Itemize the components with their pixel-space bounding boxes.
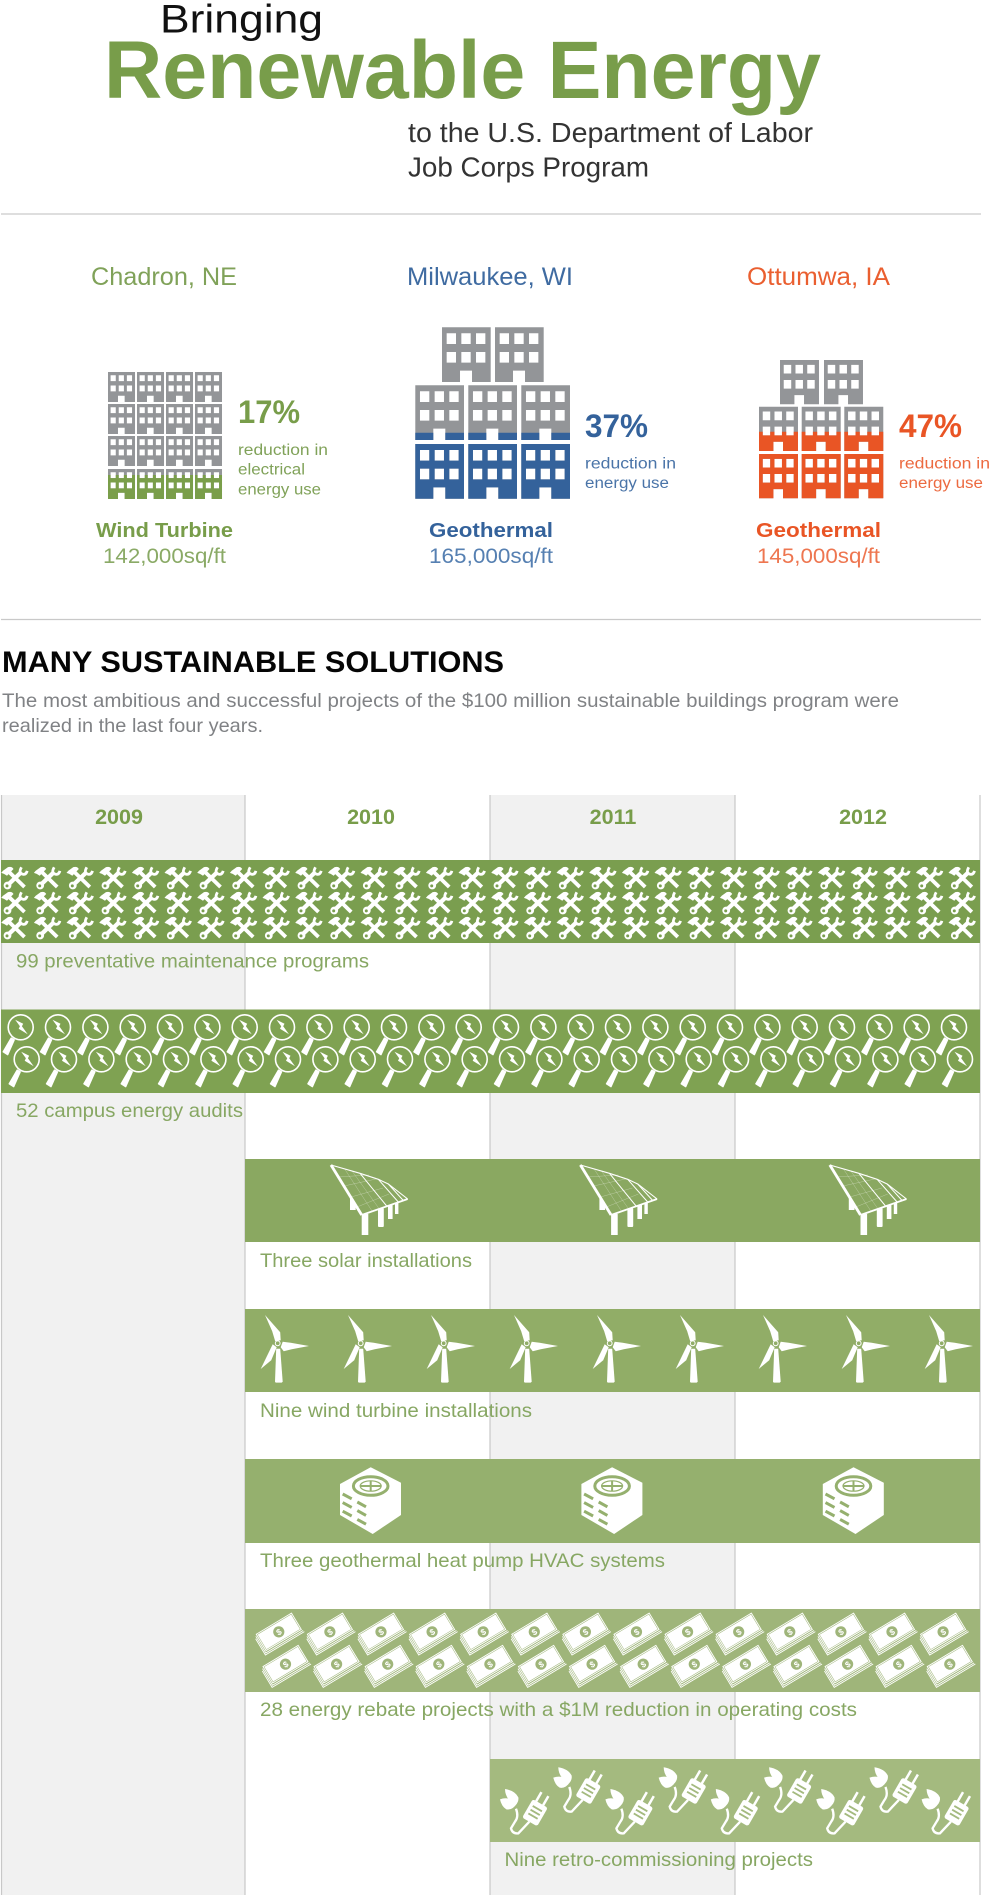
panel: Ottumwa, IA [747, 263, 990, 568]
icons: HVAC units [340, 1467, 884, 1534]
technology: Wind Turbine [96, 519, 233, 542]
icons: hammer and wrench [1, 867, 974, 939]
building stack: 47% filled [759, 360, 883, 498]
label: maintenance programs: 99 preventative maintenance programs [16, 950, 369, 972]
label: energy audits: 52 campus energy audits [16, 1100, 243, 1122]
timeline year headers: 2012 [839, 805, 887, 829]
city name: Chadron, NE [91, 263, 237, 291]
band: preventative maintenance [1, 860, 980, 943]
percentage: 17% [238, 394, 300, 430]
icons: money stacks [254, 1612, 975, 1687]
city name: Milwaukee, WI [407, 263, 573, 291]
label: retro-commissioning: Nine retro-commissioning projects [504, 1849, 813, 1871]
band: geothermal HVAC [245, 1459, 980, 1543]
label: geothermal HVAC: Three geothermal heat pump HVAC systems [260, 1550, 665, 1572]
band: energy rebates [245, 1609, 980, 1692]
timeline columns [1, 795, 980, 1895]
reduction description: energy use [585, 475, 669, 492]
panel: Chadron, NE [91, 263, 328, 568]
timeline year headers: 2011 [590, 805, 636, 829]
icons: solar panels [331, 1165, 906, 1235]
band: retro-commissioning [490, 1759, 980, 1842]
section intro: The most ambitious and successful projects of the $100 million sustainable buildings program were [2, 690, 899, 712]
timeline year headers [95, 805, 887, 829]
building grid: 17% filled [108, 372, 222, 499]
city name: Ottumwa, IA [747, 263, 890, 291]
band: energy audits [1, 1010, 980, 1093]
reduction description: reduction in [238, 442, 328, 459]
building stack: 37% filled [415, 327, 570, 499]
band: wind turbines [245, 1309, 980, 1392]
technology: Geothermal [756, 519, 881, 542]
percentage: 37% [585, 408, 648, 444]
technology: Geothermal [429, 519, 553, 542]
reduction description: energy use [899, 475, 983, 492]
reduction description: energy use [238, 482, 321, 498]
label: solar installations: Three solar installations [260, 1250, 472, 1272]
percentage: 47% [899, 408, 962, 444]
reduction description: reduction in [585, 456, 676, 472]
timeline year headers: 2010 [347, 805, 395, 829]
reduction description: electrical [238, 462, 305, 478]
label: wind turbines: Nine wind turbine installations [260, 1400, 532, 1422]
panel: Milwaukee, WI [407, 263, 676, 568]
square footage: 145,000sq/ft [757, 545, 880, 568]
icons: wind turbines [261, 1315, 973, 1383]
reduction description: reduction in [899, 456, 990, 472]
square footage: 165,000sq/ft [429, 545, 553, 568]
title [104, 0, 821, 182]
subtitle: Job Corps Program [408, 152, 649, 182]
icons: magnifying glass with lightning bolt [3, 1015, 972, 1087]
timeline year headers: 2009 [95, 805, 143, 829]
section heading: MANY SUSTAINABLE SOLUTIONS [2, 646, 504, 679]
square footage: 142,000sq/ft [103, 545, 226, 568]
label: energy rebates: 28 energy rebate projects with a $1M reduction in operating costs [260, 1699, 857, 1721]
section intro: realized in the last four years. [2, 715, 263, 737]
band: solar installations [245, 1159, 980, 1242]
title line: Renewable Energy: Renewable Energy [104, 25, 821, 116]
icons: leaf and plug [500, 1767, 975, 1833]
subtitle: to the U.S. Department of Labor [408, 117, 813, 148]
